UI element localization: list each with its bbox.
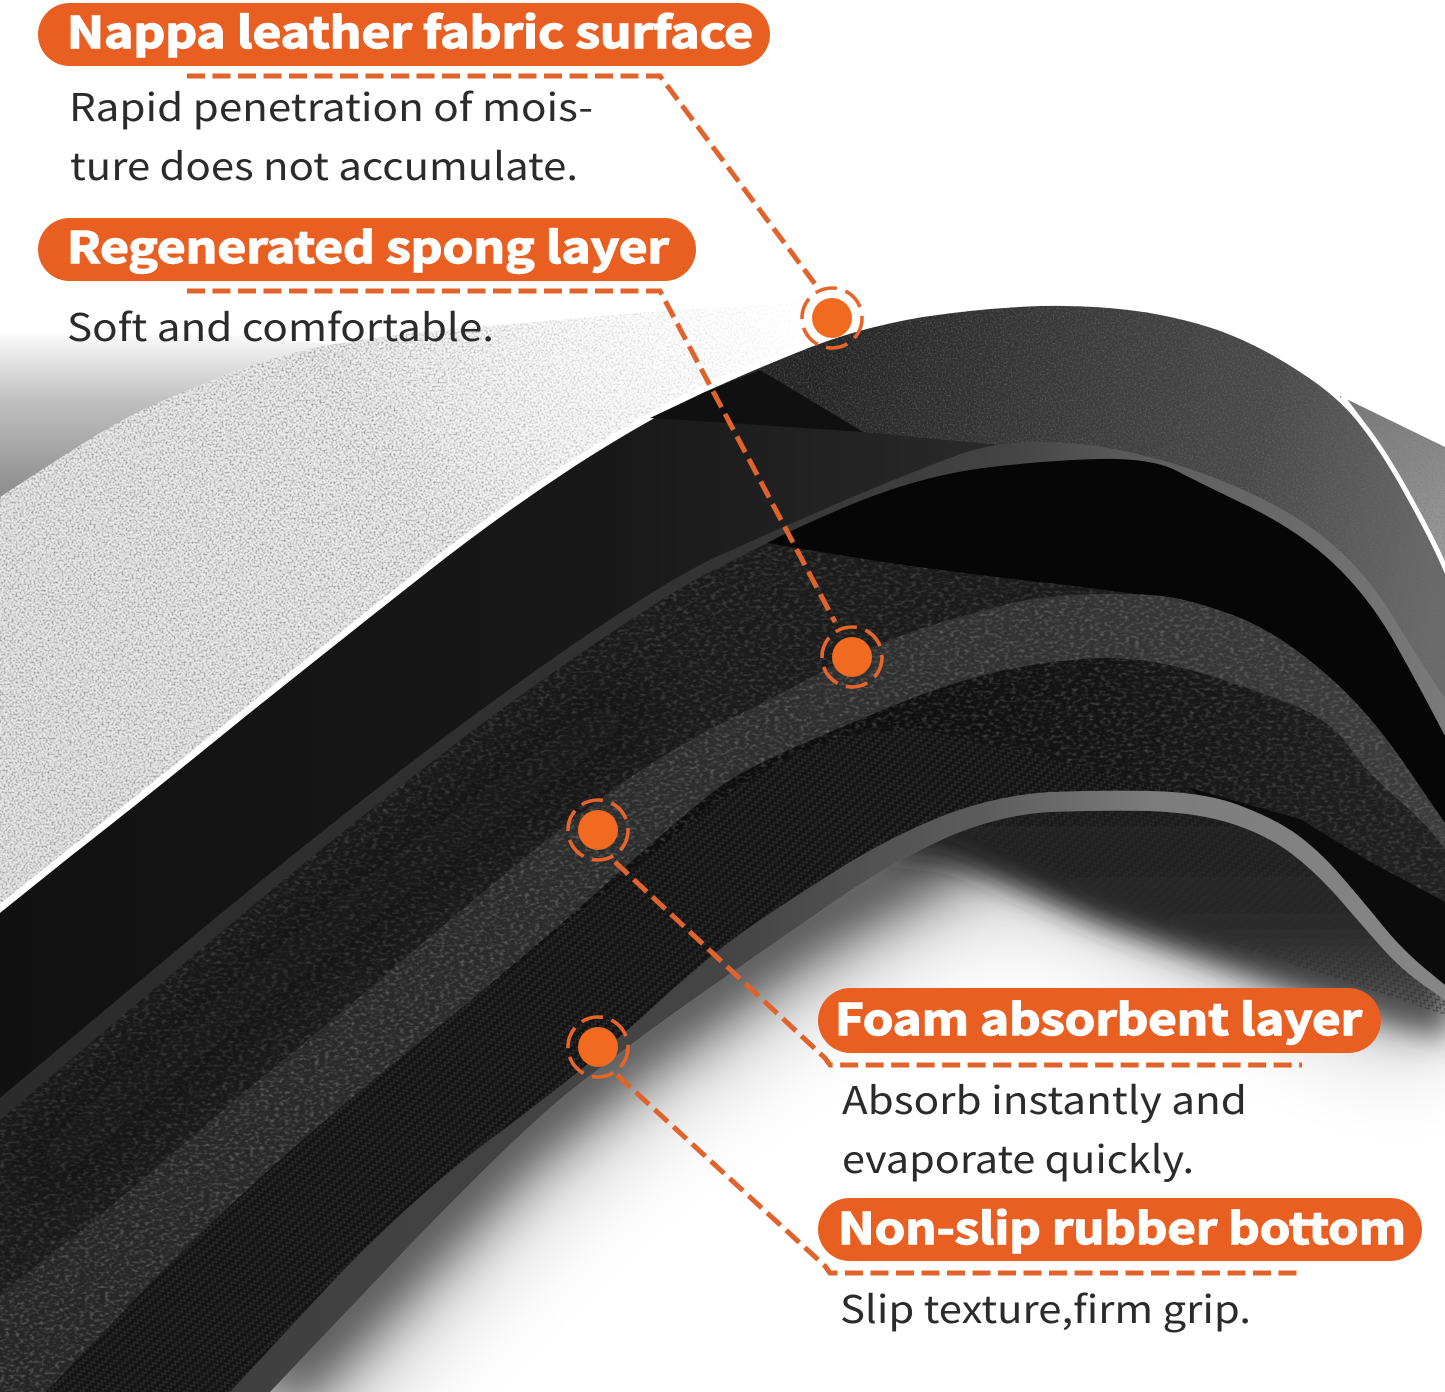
description: Soft and comfortable. [67,297,494,352]
description: Absorb instantly and [842,1070,1247,1125]
ground with shadow [270,810,1445,1392]
close shadow [270,815,1445,1392]
white ground [240,780,1445,1392]
connector line [615,862,1302,1065]
white edge of fabric [0,327,863,913]
foam underside [46,658,1445,1392]
wide soft shadow [250,815,1445,1392]
dark wedge on cut face [650,370,863,432]
underside texture [963,810,1445,1014]
marker: Foam layer [568,800,628,860]
description: ture does not accumulate. [70,136,578,191]
connector line [617,1075,1302,1273]
foam layer, dark face [0,543,1445,1392]
white edge, far right [1340,398,1445,574]
callout: Non-slip rubber bottom [617,1075,1422,1334]
white fabric surface [0,300,870,913]
dark top surface [0,306,1445,1392]
marker: Nappa leather [802,288,862,348]
callout: Foam absorbent layer [615,862,1381,1184]
dark streak in foam [30,700,640,1180]
callout: Regenerated spong layer [38,214,835,622]
foam layer, lighter lip [0,594,1445,1392]
connector line [187,76,818,288]
dark mesh underside, right [888,810,1445,1050]
back mat section, left [0,335,340,510]
description: Slip texture,firm grip. [840,1279,1251,1334]
mesh layer [46,730,1190,1392]
marker: Rubber bottom [568,1017,628,1077]
pill heading: Regenerated spong layer [67,214,669,276]
fabric highlight fade [300,300,870,633]
pill heading: Foam absorbent layer [835,986,1362,1048]
upper grey band [0,442,1445,1392]
callout: Nappa leather fabric surface [38,0,818,288]
black strip under foam, right [1190,788,1445,1010]
description: evaporate quickly. [842,1129,1194,1184]
description: Rapid penetration of mois- [69,77,593,132]
pill heading: Non-slip rubber bottom [838,1195,1406,1257]
mat illustration [0,300,1445,1392]
black gap between layers [767,459,1445,1392]
connector line [187,291,835,622]
black cut face [0,370,1000,1110]
back mat section, right [1340,396,1445,600]
outer grey rubber band [230,791,1445,1392]
description [842,1070,1247,1184]
description [69,77,593,191]
marker: Regenerated sponge [822,627,882,687]
pill heading: Nappa leather fabric surface [67,0,753,61]
